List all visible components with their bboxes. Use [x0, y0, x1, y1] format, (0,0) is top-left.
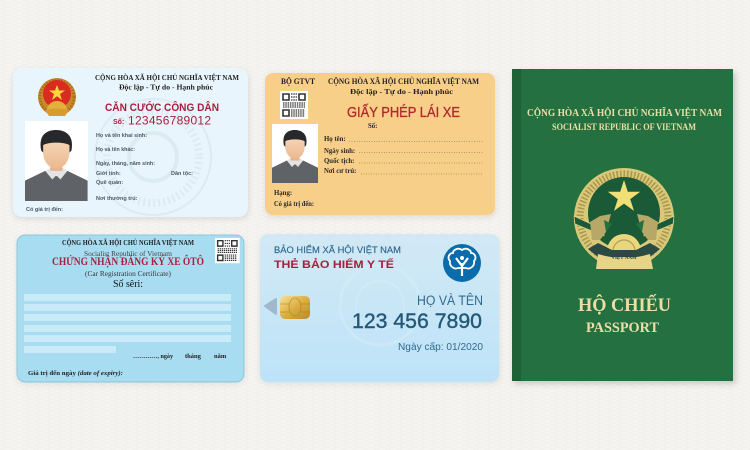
icon: national emblem [38, 78, 76, 116]
field labels: Có giá trị đến: [274, 201, 314, 208]
field labels: Họ và tên khác: [96, 147, 135, 153]
organisation name: BẢO HIỂM XÃ HỘI VIỆT NAM [274, 244, 401, 255]
icon: QR code [280, 91, 308, 119]
icon: national emblem gold [574, 168, 674, 269]
field labels [274, 123, 377, 208]
blank form lines [24, 294, 231, 353]
holder name: HỌ VÀ TÊN [417, 293, 483, 308]
field labels: Số: [368, 123, 377, 130]
header text: CỘNG HÒA XÃ HỘI CHỦ NGHĨA VIỆT NAM [328, 76, 479, 86]
title: HỘ CHIẾU [578, 294, 671, 316]
header text [52, 239, 204, 290]
card title: CĂN CƯỚC CÔNG DÂN [105, 101, 219, 114]
field labels: Giới tính: [96, 171, 121, 177]
field labels: Họ tên: [324, 136, 346, 143]
country name: SOCIALIST REPUBLIC OF VIETNAM [552, 123, 696, 133]
field labels: Nơi cư trú: [324, 168, 356, 175]
date and expiry text: Giá trị đến ngày (date of expiry): [28, 370, 123, 377]
watermark [95, 99, 211, 215]
field labels: Quê quán: [96, 180, 123, 186]
date and expiry text: …………, ngày [133, 353, 174, 360]
header text: (Car Registration Certificate) [85, 270, 172, 278]
field labels: Hạng: [274, 190, 292, 197]
card title: THẺ BẢO HIỂM Y TẾ [274, 258, 394, 271]
card title: GIẤY PHÉP LÁI XE [347, 104, 460, 121]
field labels: Nơi thường trú: [96, 196, 138, 202]
header text: CỘNG HÒA XÃ HỘI CHỦ NGHĨA VIỆT NAM [95, 74, 239, 82]
field labels: Dân tộc: [171, 171, 193, 177]
field labels: Họ và tên khai sinh: [96, 133, 147, 139]
panel: passport [512, 69, 736, 384]
header text: CỘNG HÒA XÃ HỘI CHỦ NGHĨA VIỆT NAM [62, 239, 194, 247]
date and expiry text: năm [214, 353, 227, 360]
card number: 123456789012 [128, 114, 211, 128]
field labels: Có giá trị đến: [26, 206, 63, 213]
issue date: Ngày cấp: 01/2020 [398, 341, 483, 353]
header text: CHỨNG NHẬN ĐĂNG KÝ XE ÔTÔ [52, 254, 204, 268]
date and expiry text: tháng [185, 353, 202, 360]
header text: BỘ GTVT [281, 77, 316, 86]
header text: Độc lập - Tự do - Hạnh phúc [350, 87, 454, 96]
field labels: Ngày, tháng, năm sinh: [96, 161, 155, 167]
panel: health insurance card [260, 234, 500, 384]
card number: 123 456 7890 [352, 310, 482, 333]
field labels [26, 133, 193, 213]
portrait photo [272, 124, 318, 183]
date and expiry text [28, 353, 227, 377]
field labels: Ngày sinh: [324, 148, 355, 155]
panel: vehicle registration [17, 235, 245, 384]
country name [527, 106, 722, 133]
icon: social insurance logo [443, 244, 481, 282]
header text: Số sêri: [113, 279, 143, 290]
panel: driving licence [265, 73, 496, 218]
panel: citizen ID card [13, 68, 249, 219]
portrait photo [25, 121, 88, 201]
country name: CỘNG HÒA XÃ HỘI CHỦ NGHĨA VIỆT NAM [527, 106, 722, 119]
dotted lines [349, 142, 483, 174]
header text: Độc lập - Tự do - Hạnh phúc [119, 82, 214, 92]
subtitle: PASSPORT [586, 320, 659, 336]
icon: chip with arrow [265, 296, 310, 319]
watermark [340, 265, 420, 345]
header text [281, 76, 479, 96]
icon: QR code [215, 238, 240, 263]
header text [95, 74, 239, 92]
header text: Socialist Republic of Vietnam [84, 250, 173, 258]
icon: national emblem gold: VIỆT NAM [611, 255, 637, 261]
card number: Số: [113, 118, 124, 126]
field labels: Quốc tịch: [324, 158, 354, 165]
